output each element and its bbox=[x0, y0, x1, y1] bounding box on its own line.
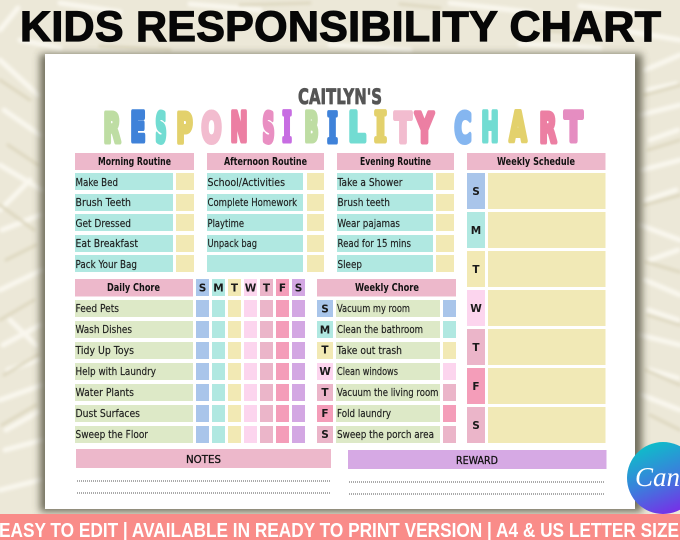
chart title letters: R bbox=[540, 106, 556, 152]
chart title letters: T bbox=[394, 106, 412, 152]
daily chore day columns bbox=[196, 279, 305, 443]
panel: afternoon routine: Playtime bbox=[208, 218, 244, 230]
chart title letters: S bbox=[156, 106, 166, 152]
panel: notes: NOTES bbox=[186, 454, 221, 466]
panel: morning routine: Get Dressed bbox=[76, 218, 131, 230]
panel: morning routine: Eat Breakfast bbox=[76, 238, 138, 250]
panel: daily chore: Feed Pets bbox=[76, 303, 119, 315]
panel: weekly schedule: F bbox=[472, 381, 480, 393]
panel: daily chore: Wash Dishes bbox=[76, 324, 132, 336]
panel: daily chore bbox=[75, 279, 305, 443]
panel: evening routine bbox=[337, 153, 454, 272]
chart title letters: I bbox=[374, 104, 386, 151]
panel: weekly schedule: T bbox=[472, 264, 480, 276]
chart title letters: I bbox=[282, 104, 292, 151]
panel: morning routine bbox=[75, 153, 194, 272]
panel: evening routine: Brush teeth bbox=[338, 197, 390, 209]
daily chore day columns: M bbox=[213, 282, 224, 294]
panel: afternoon routine bbox=[207, 153, 324, 272]
panel: weekly chore: Vacuum my room bbox=[337, 303, 410, 315]
name heading: CAITLYN'S bbox=[298, 85, 382, 109]
chart title letters bbox=[104, 104, 583, 152]
panel: afternoon routine: School/Activities bbox=[208, 177, 285, 189]
panel: evening routine: Read for 15 mins bbox=[338, 238, 411, 250]
chart title letters: N bbox=[230, 105, 248, 151]
panel: weekly schedule: T bbox=[472, 342, 480, 354]
chart title letters: B bbox=[304, 105, 318, 151]
panel: weekly chore: Clean windows bbox=[337, 366, 398, 378]
panel: morning routine: Make Bed bbox=[76, 177, 118, 189]
daily chore day columns: T bbox=[231, 282, 239, 294]
chart title letters: L bbox=[348, 105, 366, 151]
panel: weekly schedule: S bbox=[472, 186, 480, 198]
chart title letters: Y bbox=[415, 106, 434, 152]
panel: weekly chore: F bbox=[321, 408, 329, 420]
chart title letters: T bbox=[564, 105, 583, 151]
panel: afternoon routine: Complete Homework bbox=[208, 197, 298, 209]
daily chore day columns: S bbox=[295, 282, 302, 294]
panel: evening routine: Wear pajamas bbox=[338, 218, 400, 230]
panel: weekly chore: Fold laundry bbox=[337, 408, 391, 420]
panel: weekly chore: T bbox=[321, 344, 329, 356]
panel: weekly chore: W bbox=[319, 366, 331, 378]
icon: Canva badge bbox=[627, 442, 680, 514]
panel: evening routine: Take a Shower bbox=[337, 177, 403, 189]
title: KIDS RESPONSIBILITY CHART bbox=[20, 3, 661, 51]
panel: weekly schedule: M bbox=[471, 225, 481, 237]
panel: evening routine: Evening Routine bbox=[360, 156, 431, 168]
panel: morning routine: Brush Teeth bbox=[76, 197, 131, 209]
panel: morning routine: Morning Routine bbox=[98, 156, 171, 168]
panel: weekly schedule: S bbox=[472, 420, 480, 432]
panel: morning routine: Pack Your Bag bbox=[76, 259, 137, 271]
panel: notes bbox=[76, 449, 331, 493]
chart title letters: E bbox=[130, 105, 146, 151]
paper shadow bbox=[40, 54, 642, 512]
chart title letters: S bbox=[262, 106, 274, 152]
panel: reward: REWARD bbox=[456, 455, 498, 467]
panel: weekly chore bbox=[317, 279, 456, 443]
panel: weekly chore: S bbox=[321, 429, 329, 441]
panel: reward bbox=[348, 450, 606, 494]
panel: weekly chore: Take out trash bbox=[336, 345, 402, 357]
chart title letters: P bbox=[176, 106, 192, 152]
panel: weekly chore: Clean the bathroom bbox=[337, 324, 423, 336]
chart title letters: R bbox=[104, 106, 120, 152]
daily chore day columns: W bbox=[245, 282, 257, 294]
panel: daily chore: Help with Laundry bbox=[76, 366, 156, 378]
panel: daily chore: Dust Surfaces bbox=[76, 408, 140, 420]
panel: weekly schedule: W bbox=[470, 303, 482, 315]
panel: weekly schedule: Weekly Schedule bbox=[497, 156, 575, 168]
panel: weekly chore: M bbox=[320, 324, 330, 336]
panel: evening routine: Sleep bbox=[338, 259, 362, 271]
panel: afternoon routine: Unpack bag bbox=[208, 238, 257, 250]
panel: daily chore: Water Plants bbox=[76, 387, 134, 399]
chart title letters: C bbox=[454, 106, 472, 152]
daily chore day columns: F bbox=[279, 282, 286, 294]
panel: daily chore: Tidy Up Toys bbox=[75, 345, 134, 357]
panel: weekly schedule bbox=[467, 153, 606, 443]
chart title letters: H bbox=[482, 105, 498, 151]
panel: daily chore: Sweep the Floor bbox=[76, 429, 149, 441]
panel: weekly chore: Weekly Chore bbox=[355, 282, 419, 294]
daily chore day columns: S bbox=[199, 282, 206, 294]
daily chore day columns: T bbox=[263, 282, 271, 294]
panel: weekly chore: Vacuum the living room bbox=[337, 387, 438, 399]
chart title letters: A bbox=[510, 105, 527, 151]
panel: paper sheet bbox=[45, 54, 635, 509]
panel: weekly chore: Sweep the porch area bbox=[337, 429, 434, 441]
panel: daily chore: Daily Chore bbox=[107, 282, 160, 294]
chart title letters: I bbox=[328, 105, 338, 152]
panel: afternoon routine: Afternoon Routine bbox=[224, 156, 307, 168]
panel: weekly chore: S bbox=[321, 304, 329, 316]
panel: weekly chore: T bbox=[321, 387, 329, 399]
chart title letters: O bbox=[202, 106, 222, 152]
